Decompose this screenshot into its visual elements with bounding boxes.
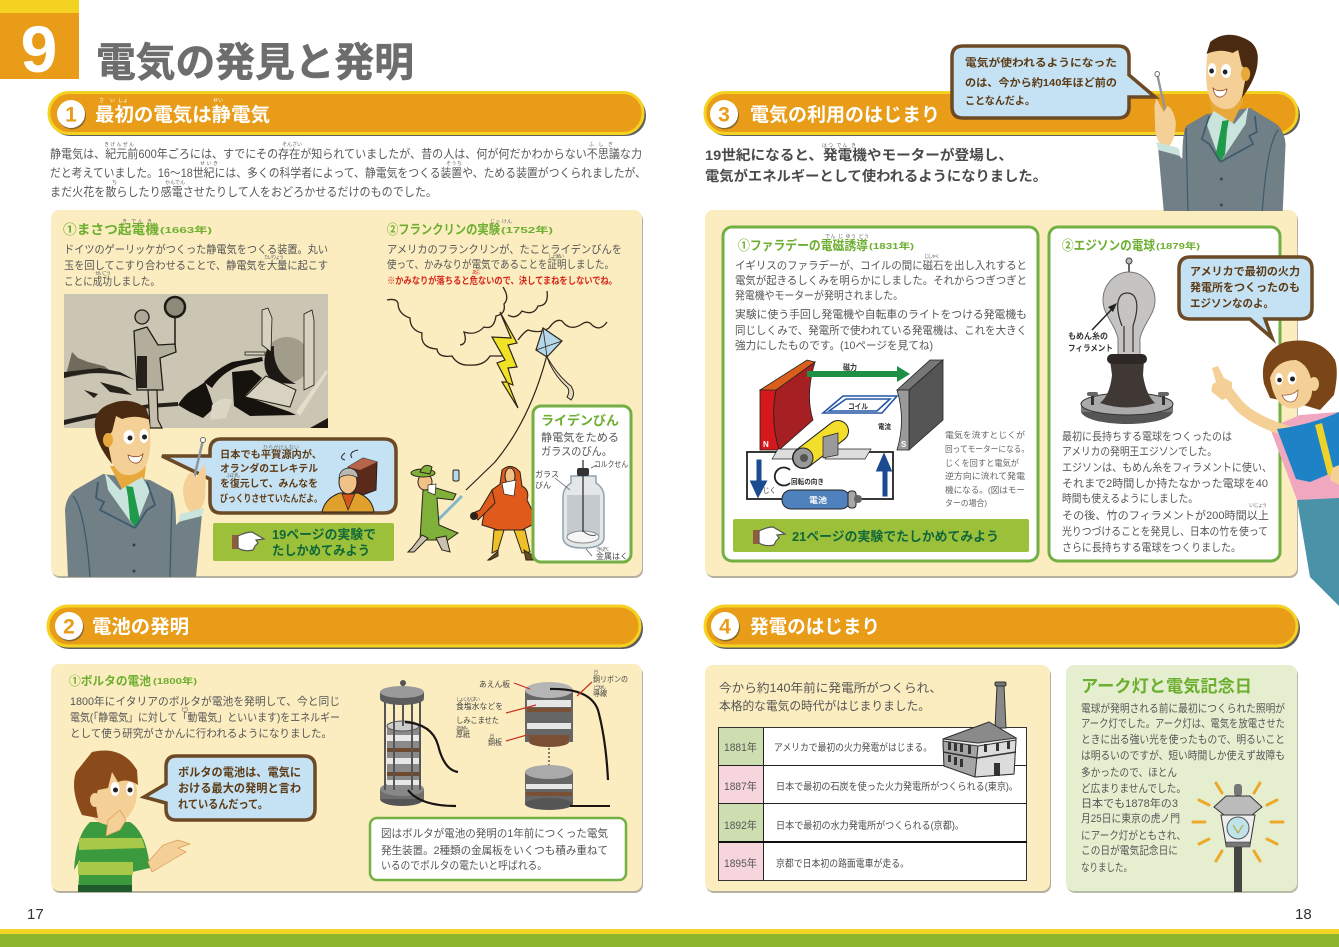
callout: Leyden jar: ガラスのびん。: [541, 445, 612, 458]
section 3 header bar: [705, 92, 1300, 136]
illustration: voltaic pile assembled: [380, 680, 458, 806]
Faraday heading: ①ファラデーの電磁誘導: [738, 238, 868, 253]
Edison heading: (1879年): [1156, 241, 1200, 251]
friction machine text: ドイツのゲーリッケがつくった静電気をつくる装置。丸い: [64, 242, 328, 256]
Edison text: それまで2時間しか持たなかった電球を40: [1062, 476, 1268, 490]
timeline intro text: 本格的な電気の時代がはじまりました。: [719, 698, 930, 713]
Faraday text: 発電機やモーターが発明されました。: [735, 288, 903, 302]
Franklin text: [387, 242, 622, 287]
bottom colour strip: [0, 929, 1339, 947]
timeline intro text: 今から約140年前に発電所がつくられ、: [719, 680, 942, 695]
illustration: storm cloud, lightning and kite: [387, 287, 607, 490]
diagram: motor and generator: じく: [763, 486, 776, 495]
diagram note: 機になる。(図はモー: [945, 485, 1025, 495]
Edison text: [1062, 429, 1272, 554]
section 3 intro text: [705, 142, 1047, 184]
section 2 header bar: [48, 606, 643, 649]
section 1 header bar: しょ: [118, 98, 128, 104]
Faraday heading: [738, 233, 914, 253]
section 1 intro text: まだ火花を散らしたり感電させたりして人をおどろかせるだけのものでした。: [50, 184, 437, 199]
labels: pile parts: どう: [593, 669, 599, 676]
friction machine heading: き でん き: [122, 218, 152, 225]
callout: experiment link page 19: 19ページの実験で: [272, 527, 376, 542]
Volta text: 電気(「静電気」に対して「動電気」といいます)をエネルギー: [70, 710, 340, 724]
callout: Leyden jar: びん: [535, 481, 551, 490]
callout: pile note: 図はボルタが電池の発明の1年前につくった電気: [381, 826, 608, 840]
section 1 header bar: さい: [99, 97, 115, 104]
callout: pile note: いるのでボルタの電たいと呼ばれる。: [381, 859, 547, 872]
diagram: motor and generator: 回転の向き: [791, 477, 824, 486]
friction machine text: せいこう: [95, 271, 111, 277]
section 1 header bar: 最初の電気は静電気: [95, 104, 270, 126]
arc lamp text: [1081, 701, 1285, 874]
panel: Faraday induction: [723, 227, 1038, 561]
labels: pile parts: しょくえんすい: [456, 697, 480, 703]
Volta text: 1800年にイタリアのボルタが電池を発明して、今と同じ: [70, 694, 340, 708]
label: filament: フィラメント: [1068, 343, 1113, 353]
diagram note: ターの場合): [945, 498, 987, 508]
illustration: woman in green with rod: [408, 465, 462, 552]
callout: Leyden jar: 金属はく: [596, 551, 628, 561]
callout: experiment link page 21: 21ページの実験でたしかめてみよう: [792, 529, 999, 544]
section 1 intro text: きげんぜん: [104, 141, 134, 148]
friction machine text: たいりょう: [264, 255, 284, 261]
arc lamp text: 多かったので、ほとん: [1081, 765, 1177, 779]
callout: Leyden jar: 静電気をためる: [541, 430, 619, 444]
Faraday text: [735, 254, 1027, 352]
illustration: light bulb: [1081, 258, 1173, 424]
label: filament: もめん糸の: [1068, 331, 1108, 341]
arc lamp text: は明るいのですが、短い時間しか使えず故障も: [1081, 748, 1285, 762]
timeline table: [718, 728, 1027, 880]
callout: experiment link page 21: [733, 519, 1029, 552]
section 1 intro text: そんざい: [282, 141, 302, 148]
Faraday text: 電気が起きるしくみを明らかにしました。それからつぎつぎと: [735, 273, 1027, 287]
speech bubble: Volta: おける最大の発明と言わ: [178, 781, 301, 795]
illustration: man in orange coat: [470, 466, 540, 560]
section 3 intro text: はつ でん き: [822, 142, 856, 149]
Volta text: どう: [181, 706, 189, 713]
section 4 header bar: 4: [719, 616, 731, 638]
arc lamp heading: アーク灯と電気記念日: [1081, 677, 1252, 696]
Edison text: エジソンは、もめん糸をフィラメントに使い、: [1062, 460, 1272, 474]
labels: pile parts: どう: [489, 733, 495, 740]
chapter number tab: [0, 0, 79, 86]
diagram: motor and generator: コイル: [848, 402, 868, 411]
chapter number tab: 9: [21, 12, 57, 86]
callout: Hiraga Gennai speech bubble: びっくりさせていたんだよ。: [220, 492, 322, 505]
section 1 intro text: かんでん: [165, 179, 185, 186]
labels: pile parts: あえん板: [479, 679, 510, 689]
speech bubble: Volta: れているんだって。: [178, 798, 268, 811]
callout: experiment link page 19: たしかめてみよう: [272, 543, 370, 558]
Edison text: 光りつづけることを発見し、日本の竹を使って: [1062, 524, 1268, 538]
Edison text: アメリカの発明王エジソンでした。: [1062, 444, 1217, 458]
timeline table: 1881年: [724, 740, 757, 754]
diagram: motor and generator: S: [901, 440, 907, 449]
callout: Leyden jar: [533, 406, 631, 562]
diagram: motor and generator: [747, 360, 943, 509]
callout: Leyden jar: ガラス: [535, 469, 559, 479]
Volta heading: (1800年): [153, 676, 197, 686]
section 1 header bar: 1: [65, 104, 77, 126]
page number 18: 18: [1295, 906, 1312, 923]
Volta heading: ①ボルタの電池: [69, 673, 151, 688]
Franklin text: あぶ: [472, 270, 480, 276]
friction machine text: 玉を回してこすり合わせることで、静電気を大量に起こす: [64, 258, 328, 272]
Faraday text: 実験に使う手回し発電機や自転車のライトをつける発電機も: [735, 307, 1027, 321]
timeline table: 1895年: [724, 856, 757, 870]
Faraday heading: (1831年): [869, 241, 914, 251]
callout: Leyden jar: ライデンびん: [541, 413, 619, 428]
section 1 intro text: せいき: [200, 160, 218, 167]
labels: pile parts: [456, 669, 628, 747]
section 1 header bar: せい: [213, 98, 223, 104]
timeline table: 京都で日本初の路面電車が走る。: [776, 857, 909, 870]
icon: Leyden jar: [563, 460, 604, 548]
diagram note: [945, 430, 1029, 508]
speech bubble: Edison note: 発電所をつくったのも: [1190, 280, 1300, 294]
panel: Volta battery: [51, 664, 643, 893]
Edison text: その後、竹のフィラメントが200時間以上: [1062, 508, 1269, 522]
arc lamp text: なりました。: [1081, 861, 1132, 874]
speech bubble: Volta: ボルタの電池は、電気に: [178, 765, 301, 779]
Edison heading: ②エジソンの電球: [1062, 238, 1155, 253]
diagram note: 逆方向に流れて発電: [945, 471, 1026, 481]
Faraday text: じしゃく: [924, 254, 940, 260]
speech bubble: teacher note: のは、今から約140年ほど前の: [965, 76, 1117, 89]
diagram note: 電気を流すとじくが: [945, 430, 1026, 440]
section 2 header bar: 電池の発明: [92, 616, 189, 638]
timeline table: 1892年: [724, 818, 757, 832]
section 1 intro text: 静電気は、紀元前600年ごろには、すでにその存在が知られていましたが、昔の人は、何が何だかわからない不思議な力: [50, 146, 642, 161]
section 1 intro text: ち: [112, 180, 117, 186]
speech bubble: Edison note: [1179, 257, 1312, 338]
illustration: thinking boy: [74, 750, 190, 892]
speech bubble: teacher note: ことなんだよ。: [965, 95, 1035, 107]
Franklin heading: (1752年): [501, 225, 553, 235]
diagram note: じくを回すと電気が: [945, 458, 1019, 468]
illustration: voltaic pile exploded view: [506, 682, 610, 810]
speech bubble: teacher note: 電気が使われるようになった: [965, 56, 1117, 69]
Faraday text: 同じしくみで、発電所で使われている発電機は、これを大きく: [735, 323, 1027, 337]
illustration: teacher pointing: [65, 401, 206, 577]
arc lamp text: アーク灯でした。アーク灯は、電気を放電させた: [1081, 716, 1285, 730]
panel: arc lamp and Electricity Day: [1066, 665, 1298, 893]
callout: Leyden jar: コルクせん: [594, 460, 628, 469]
callout: Hiraga Gennai speech bubble: ひらがげんない: [263, 444, 299, 451]
diagram: motor and generator: 磁力: [843, 362, 857, 372]
engraving: friction machine: [64, 294, 328, 428]
friction machine heading: (1663年): [160, 225, 212, 235]
illustration: girl with book: [1212, 340, 1339, 606]
icon: pointing hand: [753, 527, 785, 546]
callout: experiment link page 19: [213, 523, 394, 561]
Edison text: さらに長持ちする電球をつくりました。: [1062, 540, 1241, 554]
callout: Hiraga Gennai speech bubble: [162, 439, 396, 513]
callout: Hiraga Gennai speech bubble: ふくげん: [226, 472, 240, 479]
Volta text: [70, 694, 340, 740]
Franklin heading: [387, 219, 553, 237]
illustration: arc lamp: [1193, 783, 1283, 892]
Edison text: い じょう: [1249, 503, 1267, 509]
Franklin text: ※かみなりが落ちると危ないので、決してまねをしないでね。: [387, 275, 617, 287]
panel: static electricity: [51, 210, 643, 578]
section 1 intro text: [50, 141, 646, 199]
labels: pile parts: 銅板: [488, 737, 502, 747]
labels: pile parts: 導線: [593, 688, 607, 698]
arc lamp text: 月25日に東京の虎ノ門: [1081, 812, 1180, 825]
callout: pile note: [370, 818, 626, 880]
label: filament: [1068, 331, 1113, 353]
callout: Hiraga Gennai speech bubble: 日本でも平賀源内が、: [220, 448, 322, 461]
arc lamp text: 電球が発明される前に最初につくられた照明が: [1081, 701, 1285, 715]
Edison text: 時間も使えるようにしました。: [1062, 492, 1198, 505]
timeline intro text: [719, 680, 942, 713]
speech bubble: Edison note: アメリカで最初の火力: [1190, 264, 1300, 278]
Edison text: 最初に長持ちする電球をつくったのは: [1062, 429, 1232, 443]
diagram: motor and generator: N: [763, 440, 769, 449]
labels: pile parts: 食塩水などを: [456, 701, 503, 711]
Volta heading: [69, 673, 197, 688]
labels: pile parts: しみこませた: [456, 716, 499, 725]
diagram: motor and generator: 電流: [878, 422, 891, 431]
timeline table: 1887年: [724, 779, 757, 793]
callout: Hiraga Gennai speech bubble: オランダのエレキテル: [220, 462, 318, 475]
Volta text: として使う研究がさかんに行われるようになりました。: [70, 726, 332, 740]
timeline table: 日本で最初の水力発電所がつくられる(京都)。: [776, 819, 964, 832]
section 4 header bar: [705, 606, 1300, 649]
arc lamp text: にアーク灯がともされ、: [1081, 828, 1186, 842]
labels: pile parts: どうせん: [593, 684, 606, 691]
friction machine heading: [63, 218, 212, 237]
Franklin text: しょうめい: [548, 254, 564, 260]
labels: pile parts: 厚紙: [456, 729, 470, 739]
section 3 intro text: 電気がエネルギーとして使われるようになりました。: [705, 168, 1047, 184]
Franklin text: 使って、かみなりが電気であることを証明しました。: [387, 257, 614, 271]
section 1 intro text: だと考えていました。16〜18世紀には、多くの科学者によって、静電気をつくる装置や、ためる装置がつくられましたが、: [50, 165, 646, 180]
Franklin heading: じっ けん: [490, 219, 512, 225]
diagram note: 回ってモーターになる。: [945, 444, 1029, 454]
Faraday heading: でん じ ゆう どう: [825, 233, 869, 240]
panel: Edison light bulb: [1049, 227, 1280, 561]
arc lamp text: 日本でも1878年の3: [1081, 796, 1178, 810]
speech bubble: Volta: [144, 756, 315, 820]
panel: early electricity use: [705, 210, 1298, 578]
labels: pile parts: 銅リボンの: [593, 674, 628, 684]
icon: pointing hand: [232, 532, 264, 551]
section 3 intro text: 19世紀になると、発電機やモーターが登場し、: [705, 147, 1013, 163]
callout: Leyden jar: きんぞく: [596, 546, 610, 553]
title: 電気の発見と発明: [96, 41, 414, 85]
timeline table: アメリカで最初の火力発電がはじまる。: [774, 741, 932, 754]
friction machine heading: ①まさつ起電機: [63, 222, 159, 237]
Faraday text: 強力にしたものです。(10ページを見てね): [735, 339, 933, 352]
arc lamp text: この日が電気記念日に: [1081, 843, 1178, 857]
arc lamp text: ど広まりませんでした。: [1081, 782, 1186, 795]
panel: power stations timeline: [705, 665, 1051, 893]
section 3 header bar: 3: [718, 104, 730, 126]
section 3 header bar: 電気の利用のはじまり: [750, 104, 940, 126]
speech bubble: teacher note: [952, 46, 1155, 118]
labels: pile parts: あつがみ: [456, 725, 468, 732]
diagram: motor and generator: 電池: [809, 495, 827, 505]
section 2 header bar: 2: [63, 616, 75, 638]
section 1 intro text: そうち: [446, 160, 462, 167]
Franklin text: アメリカのフランクリンが、たことライデンびんを: [387, 242, 622, 256]
arc lamp text: ときに出る強い光を使ったもので、明るいこと: [1081, 732, 1285, 746]
callout: Hiraga Gennai speech bubble: を復元して、みんなを: [220, 477, 318, 490]
friction machine text: [64, 242, 328, 288]
icon: Gennai with electric box: [322, 450, 377, 512]
illustration: power station: [943, 682, 1016, 777]
Faraday text: イギリスのファラデーが、コイルの間に磁石を出し入れすると: [735, 258, 1027, 272]
page number 17: 17: [27, 906, 44, 923]
illustration: teacher with speech bubble: [1154, 35, 1286, 211]
section 1 header bar: [49, 92, 646, 136]
section 1 intro text: ふしぎ: [589, 141, 613, 148]
speech bubble: Edison note: エジソンなのよ。: [1190, 297, 1274, 310]
timeline table: 日本で最初の石炭を使った火力発電所がつくられる(東京)。: [776, 780, 1018, 793]
callout: pile note: 発生装置。2種類の金属板をいくつも積み重ねて: [381, 843, 608, 857]
friction machine text: ことに成功しました。: [64, 275, 160, 288]
Franklin heading: ②フランクリンの実験: [387, 222, 500, 237]
section 4 header bar: 発電のはじまり: [750, 616, 880, 638]
